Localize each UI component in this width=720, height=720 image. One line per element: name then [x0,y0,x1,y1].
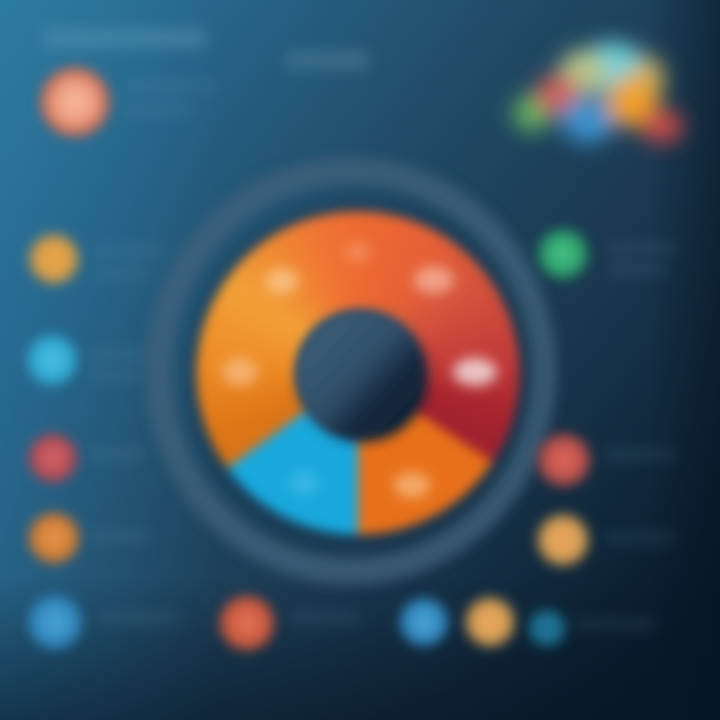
icon: green [538,229,588,279]
outer ring [159,171,543,571]
icon: gold bottom [465,597,515,647]
donut chart [188,202,528,543]
donut labels [222,241,497,498]
icon: orange [29,513,79,563]
icon: amber [29,234,79,284]
donut shadow [190,205,526,541]
title placeholder [42,28,207,48]
icon: rose [29,434,77,482]
icon: red right [538,434,590,486]
center hub [296,310,428,442]
blurred text lines [90,80,675,630]
icon: cyan [27,335,77,385]
colorful cloud icon [513,42,683,143]
icon: blue [28,595,82,649]
icon: gold right [537,514,589,566]
icon: blue bottom [400,598,448,646]
heading placeholder [285,50,370,70]
icon: peach badge [40,67,110,137]
icon: red-orange bottom [220,596,274,650]
icon: teal bottom [529,610,565,646]
